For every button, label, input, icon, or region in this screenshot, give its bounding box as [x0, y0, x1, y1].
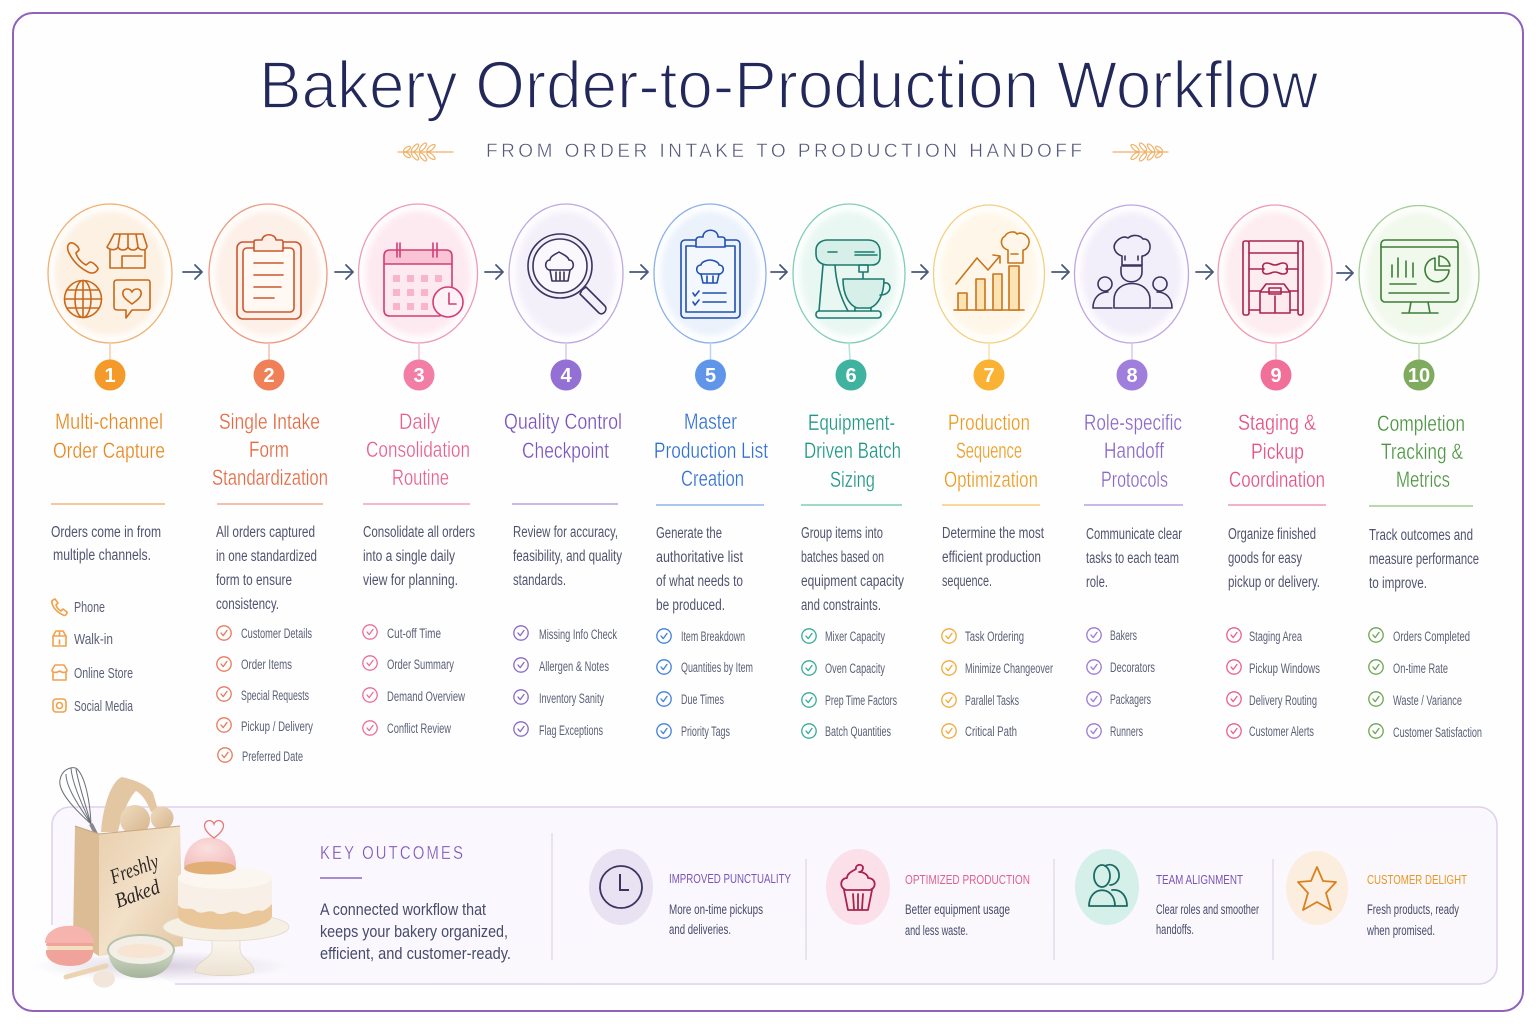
step 6 number badge	[836, 343, 866, 390]
step 2 checklist: Customer Details	[241, 626, 312, 641]
icon: clock	[589, 849, 653, 925]
panel: step 9 staging and pickup	[1218, 205, 1332, 739]
step 2 heading: Form	[249, 437, 289, 462]
step 6 description	[801, 525, 904, 614]
step 10 number badge: 10	[1408, 365, 1430, 387]
icon: chef and team	[1093, 235, 1172, 308]
step 6 checklist	[802, 629, 897, 739]
outcome: customer delight: Fresh products, ready	[1367, 902, 1459, 917]
step 5 number badge: 5	[705, 365, 716, 387]
step 1 description: multiple channels.	[53, 547, 151, 564]
step 1 number badge	[94, 343, 126, 390]
step 4 heading: Checkpoint	[522, 438, 609, 463]
step 10 checklist: Customer Satisfaction	[1393, 725, 1482, 740]
step 3 heading: Consolidation	[366, 437, 470, 462]
panel: step 4 quality control	[504, 204, 623, 738]
step 10 heading: Tracking &	[1381, 439, 1463, 464]
outcome: team alignment: TEAM ALIGNMENT	[1156, 872, 1243, 887]
step 7 checklist: Critical Path	[965, 724, 1017, 739]
step 8 description: Communicate clear	[1086, 526, 1182, 543]
step 8 checklist: Packagers	[1110, 692, 1151, 707]
step 9 circle	[1218, 205, 1332, 343]
icon: two people	[1075, 849, 1139, 925]
step 8 description	[1086, 526, 1182, 591]
icon: clipboard	[237, 235, 301, 319]
step 5 checklist: Due Times	[681, 692, 724, 707]
step 2 checklist: Pickup / Delivery	[241, 719, 313, 734]
step 4 description: feasibility, and quality	[513, 548, 622, 565]
step 10 heading: Completion	[1377, 411, 1465, 436]
step 3 description: Consolidate all orders	[363, 524, 475, 541]
panel: key outcomes	[52, 807, 1497, 984]
step 9 checklist: Staging Area	[1249, 629, 1302, 644]
step 6 checklist: Batch Quantities	[825, 724, 891, 739]
step 7 heading: Optimization	[944, 467, 1038, 492]
step 2 description: form to ensure	[216, 572, 292, 589]
step 4 description: standards.	[513, 572, 566, 589]
step 9 checklist: Delivery Routing	[1249, 693, 1317, 708]
step 1 channel list: Online Store	[74, 666, 133, 682]
illustration: whisk	[60, 768, 97, 836]
step 1 heading	[53, 409, 165, 463]
step 7 number badge	[974, 343, 1004, 390]
step 5 heading: Production List	[654, 438, 768, 463]
step 5 checklist: Item Breakdown	[681, 629, 745, 644]
step 1 channel list: Phone	[74, 600, 105, 616]
step 6 description: equipment capacity	[801, 573, 904, 590]
step 8 number badge	[1116, 343, 1148, 390]
step 3 heading	[366, 409, 470, 490]
icon: wheat ornament left	[398, 142, 453, 162]
step 9 heading: Staging &	[1238, 410, 1316, 435]
step 2 heading: Standardization	[212, 465, 328, 490]
step 1 heading: Order Capture	[53, 438, 165, 463]
step 2 description	[216, 524, 317, 613]
step 10 checklist	[1369, 628, 1482, 740]
outcome: improved punctuality: IMPROVED PUNCTUALITY	[669, 871, 791, 886]
outcome: optimized production: and less waste.	[905, 923, 968, 938]
step 5 circle	[654, 204, 766, 343]
arrows between steps	[183, 265, 1353, 280]
key outcomes summary	[320, 901, 511, 963]
step 8 checklist: Bakers	[1110, 628, 1137, 643]
step 10 checklist: Waste / Variance	[1393, 693, 1462, 708]
outcome: optimized production: OPTIMIZED PRODUCTION	[905, 872, 1030, 887]
step 7 description: Determine the most	[942, 525, 1045, 542]
step 2 checklist	[217, 626, 313, 764]
step 4 heading	[504, 409, 622, 463]
step 9 description: goods for easy	[1228, 550, 1302, 567]
step 10 checklist: Orders Completed	[1393, 629, 1470, 644]
outcome: customer delight: when promised.	[1366, 923, 1435, 938]
panel: step 2 single intake form	[209, 204, 328, 764]
step 3 circle	[358, 204, 478, 343]
icon: stand mixer	[816, 240, 890, 318]
step 6 checklist: Oven Capacity	[825, 661, 885, 676]
step 8 heading: Role-specific	[1084, 410, 1182, 435]
step 3 checklist: Cut-off Time	[387, 626, 441, 641]
step 10 heading	[1377, 411, 1465, 492]
step 8 checklist: Runners	[1110, 724, 1143, 739]
step 8 description: tasks to each team	[1086, 550, 1179, 567]
step 4 description	[513, 524, 622, 589]
icon: growth bars with chef hat	[954, 232, 1029, 310]
step 2 checklist: Preferred Date	[242, 749, 303, 764]
step 1 channel list	[52, 599, 134, 715]
outcome: team alignment	[1075, 849, 1259, 937]
step 6 circle	[793, 204, 905, 343]
icon: clipboard with cupcake	[681, 230, 740, 318]
panel: step 6 equipment-driven batch sizing	[793, 204, 905, 739]
illustration: egg and biscuit	[66, 966, 115, 988]
step 3 checklist: Conflict Review	[387, 721, 451, 736]
step 4 checklist: Inventory Sanity	[539, 691, 604, 706]
step 7 circle	[934, 205, 1044, 343]
outcome: team alignment: Clear roles and smoother	[1156, 902, 1259, 917]
key outcomes summary: A connected workflow that	[320, 901, 486, 919]
step 2 description: consistency.	[216, 596, 279, 613]
step 7 checklist: Minimize Changeover	[965, 661, 1053, 676]
step 3 description: into a single daily	[363, 548, 455, 565]
step 5 checklist: Quantities by Item	[681, 660, 753, 675]
step 9 checklist: Customer Alerts	[1249, 724, 1314, 739]
step 9 heading: Coordination	[1229, 467, 1325, 492]
step 6 number badge: 6	[845, 365, 857, 387]
step 6 heading: Sizing	[830, 467, 875, 492]
step 5 description	[656, 525, 744, 614]
step 3 number badge	[404, 343, 434, 390]
panel: step 1 multi-channel order capture	[48, 204, 172, 715]
step 4 heading: Quality Control	[504, 409, 622, 434]
outcome: customer delight	[1286, 851, 1467, 938]
step 7 description	[942, 525, 1045, 590]
step 9 description	[1228, 526, 1320, 591]
step 5 heading: Master	[684, 409, 737, 434]
icon: cupcake	[826, 849, 890, 925]
step 1 circle	[48, 204, 172, 343]
key outcomes summary: efficient, and customer-ready.	[320, 945, 511, 963]
step 2 heading: Single Intake	[219, 409, 320, 434]
step 7 number badge: 7	[983, 365, 995, 387]
step 3 heading: Daily	[399, 409, 440, 434]
step 4 checklist: Missing Info Check	[539, 627, 617, 642]
icon: wheat ornament right	[1113, 142, 1168, 162]
step 4 description: Review for accuracy,	[513, 524, 618, 541]
icon: shelf with box	[1243, 241, 1303, 315]
step 7 heading: Sequence	[956, 438, 1022, 463]
step 8 checklist	[1087, 628, 1155, 739]
panel: step 3 daily consolidation	[358, 204, 478, 736]
step 7 checklist	[942, 629, 1053, 739]
step 9 heading: Pickup	[1251, 439, 1304, 464]
step 4 number badge	[550, 343, 582, 390]
step 6 heading	[804, 410, 901, 492]
step 10 number badge	[1404, 343, 1434, 390]
step 9 number badge: 9	[1270, 365, 1282, 387]
step 8 heading: Handoff	[1104, 438, 1165, 463]
step 7 description: efficient production	[942, 549, 1041, 566]
step 6 description: batches based on	[801, 549, 884, 566]
step 2 number badge: 2	[263, 365, 275, 387]
subtitle: FROM ORDER INTAKE TO PRODUCTION HANDOFF	[486, 141, 1082, 162]
step 9 heading	[1229, 410, 1325, 492]
step 5 description: Generate the	[656, 525, 722, 542]
panel: step 7 production sequence optimization	[934, 205, 1053, 739]
step 10 description: to improve.	[1369, 575, 1427, 592]
step 5 description: of what needs to	[656, 573, 743, 590]
step 8 circle	[1074, 205, 1188, 343]
step 9 number badge	[1260, 343, 1292, 390]
step 7 checklist: Task Ordering	[965, 629, 1024, 644]
step 6 description: Group items into	[801, 525, 883, 542]
step 1 channel list: Walk-in	[74, 632, 113, 648]
step 3 checklist	[363, 625, 465, 736]
icon: star	[1286, 851, 1348, 925]
outcome: optimized production	[826, 849, 1030, 938]
step 10 description: measure performance	[1369, 551, 1479, 568]
step 5 checklist	[657, 629, 753, 739]
step 10 circle	[1359, 206, 1479, 344]
step 7 checklist: Parallel Tasks	[965, 693, 1019, 708]
outcome: team alignment: handoffs.	[1156, 922, 1194, 937]
step 5 number badge	[695, 343, 726, 390]
illustration: paper bag: Freshly	[106, 849, 162, 889]
step 9 description: pickup or delivery.	[1228, 574, 1320, 591]
step 6 checklist: Prep Time Factors	[825, 693, 897, 708]
step 10 description: Track outcomes and	[1369, 527, 1473, 544]
step 10 checklist: On-time Rate	[1393, 661, 1448, 676]
step 1 description	[51, 524, 161, 564]
illustration: paper bag: Baked	[112, 874, 163, 913]
step 3 heading: Routine	[392, 465, 449, 490]
step 1 description: Orders come in from	[51, 524, 161, 541]
step 9 checklist	[1227, 628, 1320, 739]
illustration: mixing bowl	[108, 935, 174, 978]
step 4 number badge: 4	[560, 365, 572, 387]
step 5 heading: Creation	[681, 466, 744, 491]
step 2 checklist: Order Items	[241, 657, 292, 672]
outcome: improved punctuality: and deliveries.	[669, 922, 731, 937]
step 9 checklist: Pickup Windows	[1249, 661, 1320, 676]
step 2 heading	[212, 409, 328, 490]
step 4 checklist: Flag Exceptions	[539, 723, 603, 738]
step 1 heading: Multi-channel	[55, 409, 163, 434]
step 10 description	[1369, 527, 1479, 592]
step 8 heading	[1084, 410, 1182, 492]
step 8 heading: Protocols	[1101, 467, 1168, 492]
step 2 circle	[209, 204, 327, 343]
step 6 checklist: Mixer Capacity	[825, 629, 885, 644]
icon: monitor dashboard	[1381, 240, 1458, 313]
illustration: cake on stand	[163, 821, 289, 976]
step 6 description: and constraints.	[801, 597, 881, 614]
panel: step 10 completion tracking	[1359, 206, 1482, 740]
step 5 heading	[654, 409, 768, 491]
step 4 circle	[509, 204, 623, 343]
step 2 description: All orders captured	[216, 524, 315, 541]
step 3 description	[363, 524, 475, 589]
step 3 checklist: Demand Overview	[387, 689, 465, 704]
step 5 description: be produced.	[656, 597, 725, 614]
step 4 checklist	[514, 626, 617, 738]
key outcomes heading: KEY OUTCOMES	[320, 843, 465, 863]
step 7 heading	[944, 410, 1038, 492]
step 5 description: authoritative list	[656, 549, 744, 566]
step 8 checklist: Decorators	[1110, 660, 1155, 675]
illustration: bakery bag, cake and treats	[30, 768, 290, 988]
outcome: optimized production: Better equipment usage	[905, 902, 1010, 917]
step 2 checklist: Special Requests	[241, 688, 309, 703]
title: Bakery Order-to-Production Workflow	[259, 48, 1319, 123]
step 2 number badge	[254, 343, 284, 390]
step 7 heading: Production	[948, 410, 1030, 435]
step 3 number badge: 3	[413, 365, 425, 387]
illustration: paper bag	[73, 777, 183, 956]
outcome: improved punctuality	[589, 849, 791, 937]
step 1 channel list: Social Media	[74, 699, 134, 715]
step 5 checklist: Priority Tags	[681, 724, 730, 739]
icon: magnifier with cupcake	[528, 234, 606, 314]
step 8 description: role.	[1086, 574, 1108, 591]
step 6 heading: Driven Batch	[804, 438, 901, 463]
key outcomes summary: keeps your bakery organized,	[320, 923, 508, 941]
panel: step 8 role-specific handoff	[1074, 205, 1188, 739]
outcome: improved punctuality: More on-time pickups	[669, 902, 763, 917]
step 3 checklist: Order Summary	[387, 657, 454, 672]
step 1 number badge: 1	[104, 365, 116, 387]
step 8 number badge: 8	[1126, 365, 1138, 387]
icon: calendar with clock	[384, 243, 463, 317]
step 10 heading: Metrics	[1396, 467, 1450, 492]
icon: phone, store, globe, speech heart	[64, 234, 150, 318]
step 7 description: sequence.	[942, 573, 992, 590]
panel: step 5 master production list	[654, 204, 768, 739]
outcome: customer delight: CUSTOMER DELIGHT	[1367, 872, 1467, 887]
step 2 description: in one standardized	[216, 548, 317, 565]
step 4 checklist: Allergen & Notes	[539, 659, 609, 674]
step 9 description: Organize finished	[1228, 526, 1316, 543]
step 6 heading: Equipment-	[808, 410, 895, 435]
step 3 description: view for planning.	[363, 572, 458, 589]
illustration: macaron	[45, 926, 94, 966]
